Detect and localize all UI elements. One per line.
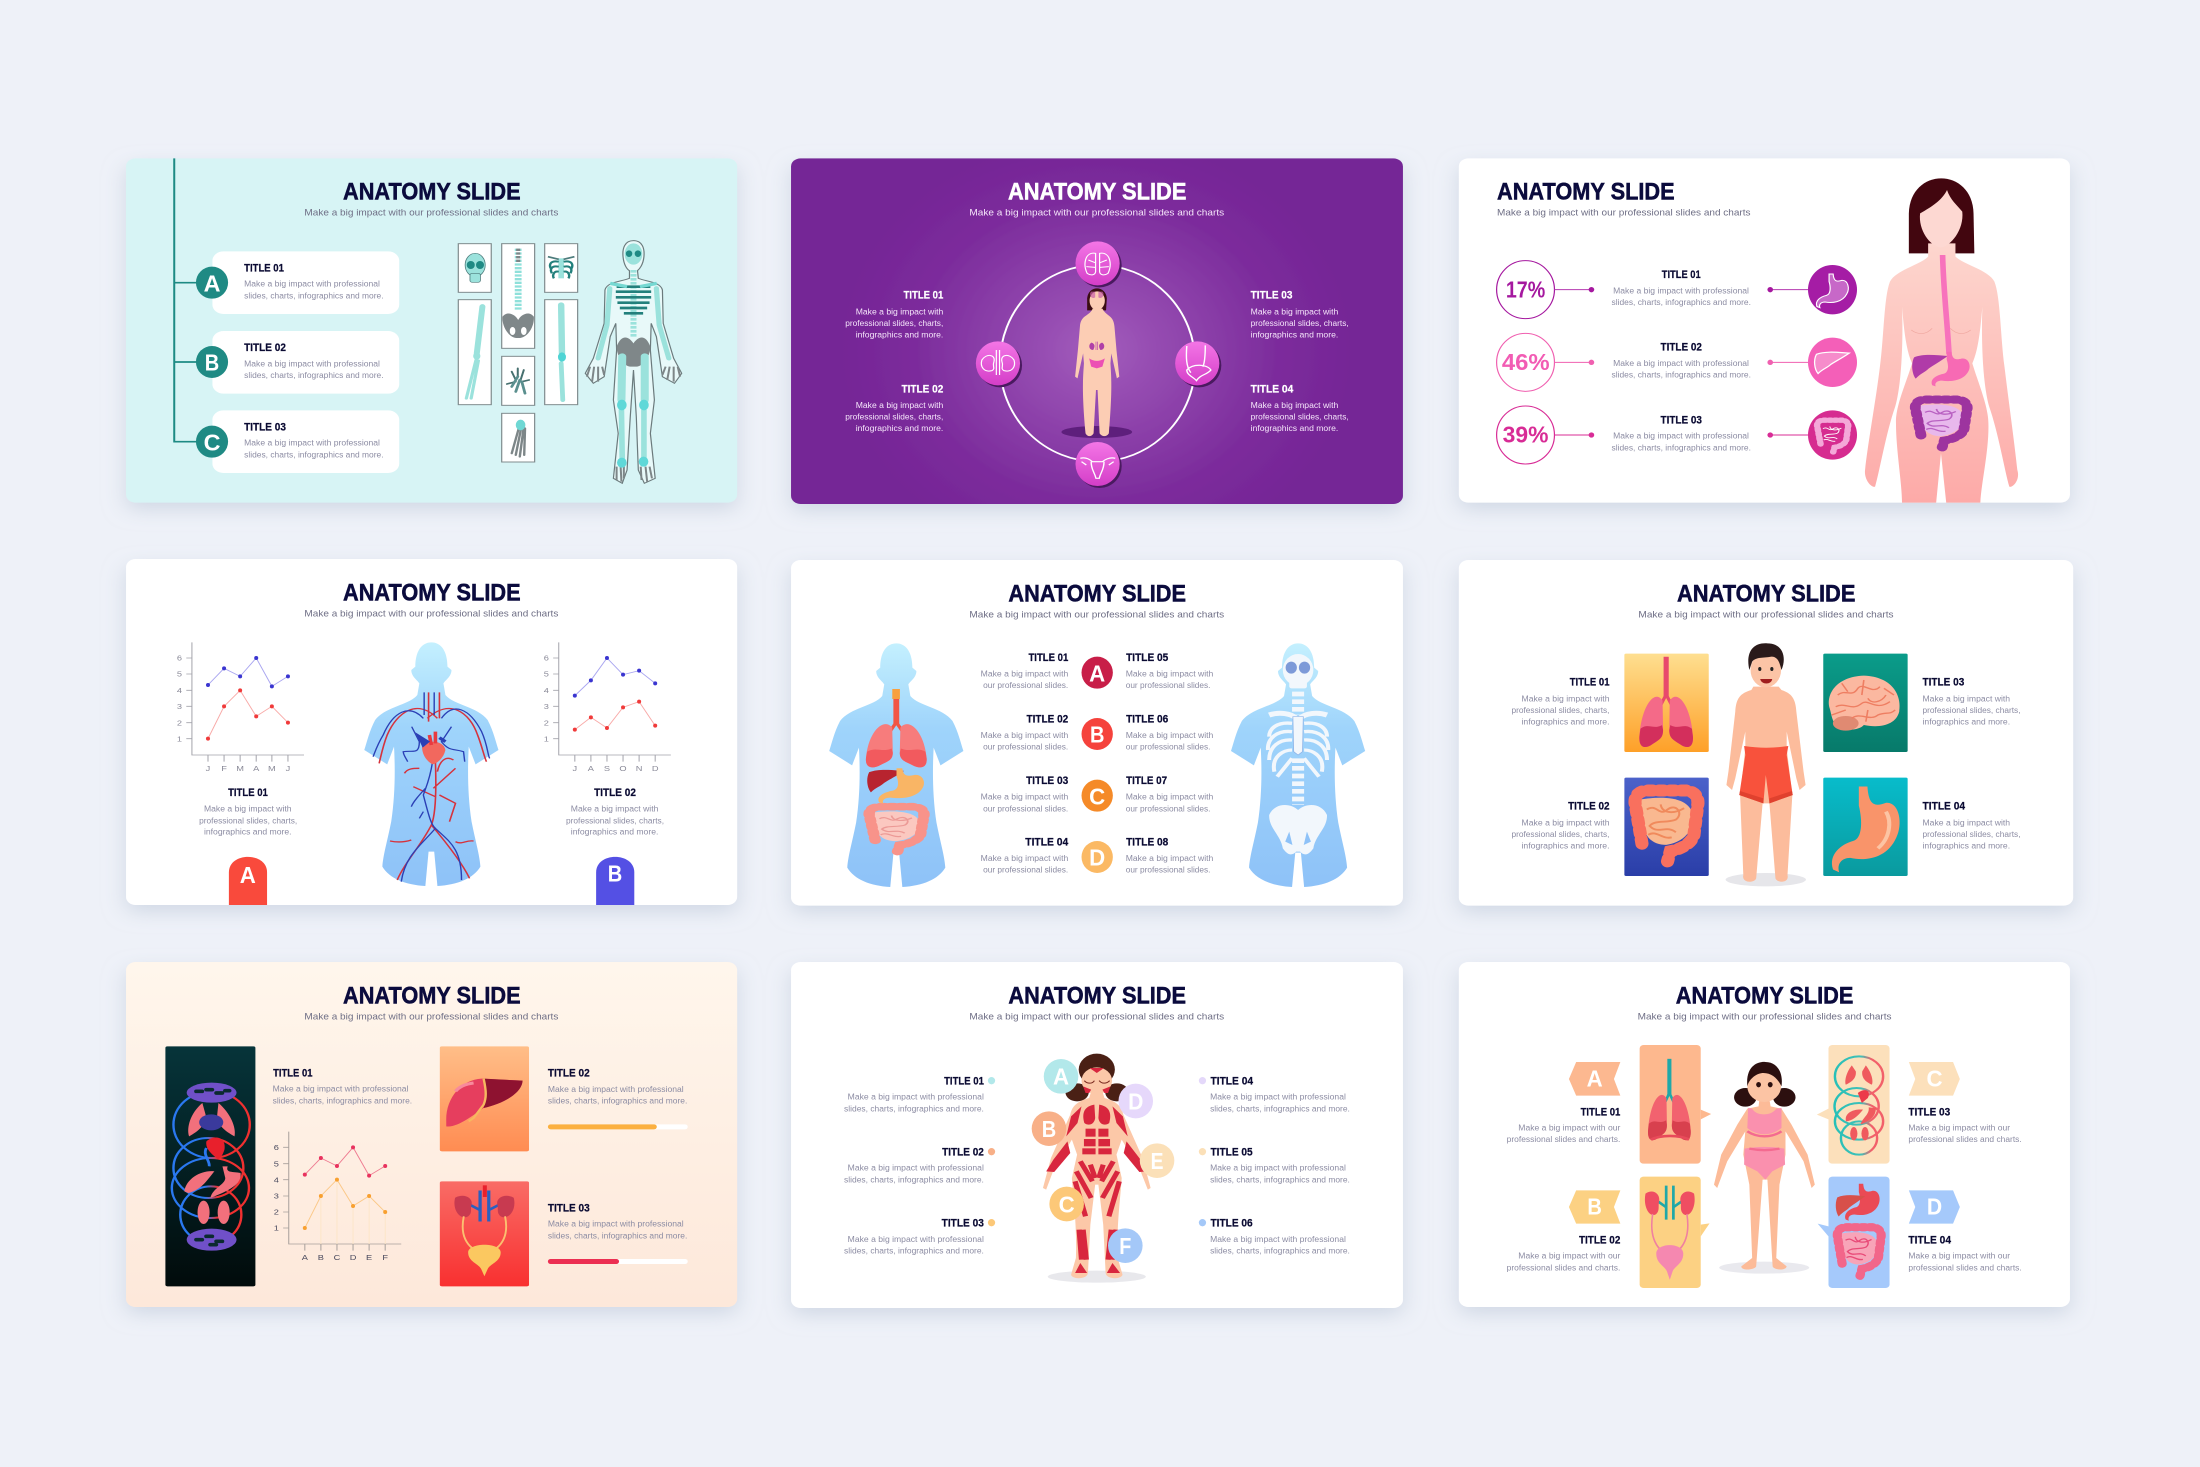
- text: title 03: professional slides, charts,: [1923, 706, 2021, 715]
- text: title 01: Make a big impact with professional: [1613, 286, 1749, 295]
- text: title 03: [1612, 413, 1751, 452]
- item C: TITLE 07: [1126, 774, 1167, 787]
- subtitle: Make a big impact with our professional slides and charts: [1638, 610, 1894, 620]
- line chart B: D: [652, 764, 659, 773]
- bone frames: [458, 244, 578, 462]
- tree connector: [174, 158, 196, 442]
- text: title 03: TITLE 03: [942, 1216, 984, 1229]
- card: intestine: [1624, 778, 1709, 876]
- title: ANATOMY SLIDE: [1008, 178, 1186, 205]
- text: title 03: TITLE 03: [1661, 413, 1702, 426]
- text: title 02: TITLE 02: [548, 1067, 590, 1079]
- item A: [981, 651, 1213, 690]
- line chart A: [177, 642, 304, 773]
- icon: liver: [1767, 338, 1857, 387]
- line chart: D: [350, 1253, 356, 1262]
- text: title 01: professional slides, charts,: [1511, 706, 1610, 715]
- text: title 03: [548, 1201, 687, 1240]
- tag A with text: TITLE 01: [1581, 1105, 1621, 1118]
- card: lungs: [1624, 654, 1709, 752]
- item C: Make a big impact with: [1126, 792, 1213, 801]
- item D: D: [1089, 846, 1105, 871]
- badge E: [1140, 1143, 1174, 1178]
- title: ANATOMY SLIDE: [1677, 580, 1855, 607]
- text: title 01: infographics and more.: [1522, 717, 1610, 726]
- text: title 01: Make a big impact with professional: [848, 1092, 984, 1101]
- item A: Make a big impact with professional: [244, 279, 380, 288]
- item C: slides, charts, infographics and more.: [244, 450, 384, 459]
- tag B with text: professional slides and charts.: [1507, 1263, 1620, 1272]
- tab B: [596, 857, 634, 905]
- line chart: B: [318, 1253, 324, 1262]
- item C: C: [204, 430, 220, 456]
- text: title 01: [1612, 268, 1751, 307]
- line chart: 5: [274, 1159, 279, 1168]
- text: title 01: TITLE 01: [228, 786, 268, 799]
- line chart A: 5: [177, 669, 182, 678]
- subtitle: Make a big impact with our professional slides and charts: [1497, 208, 1751, 218]
- line chart: 2: [274, 1207, 279, 1216]
- torso with skeleton: [1231, 643, 1365, 887]
- item C: Make a big impact with: [981, 792, 1068, 801]
- girl figure: [1714, 1062, 1815, 1274]
- icon: uterus: [1075, 442, 1122, 488]
- badge F: [1108, 1228, 1143, 1263]
- ring: [1000, 265, 1195, 462]
- text: title 02: Make a big impact with: [571, 804, 658, 813]
- tag D with text: Make a big impact with our: [1908, 1251, 2010, 1260]
- item B: B: [205, 351, 219, 376]
- line chart: 6: [274, 1143, 279, 1152]
- text: title 03: slides, charts, infographics and more.: [548, 1231, 687, 1240]
- title: ANATOMY SLIDE: [1497, 178, 1675, 205]
- text: title 03: slides, charts, infographics and more.: [1612, 443, 1751, 452]
- text: title 01: TITLE 01: [904, 289, 943, 301]
- text: title 04: professional slides, charts,: [1251, 412, 1349, 421]
- tag B with text: TITLE 02: [1579, 1233, 1621, 1246]
- line chart A: J: [286, 764, 290, 773]
- line chart A: 1: [177, 734, 182, 743]
- tab A: [229, 857, 267, 905]
- item B: [981, 712, 1213, 751]
- item A: slides, charts, infographics and more.: [244, 291, 384, 300]
- panel: boy and organ cards slide: [1459, 560, 2073, 906]
- panel: line charts and circulatory slide: [126, 559, 737, 905]
- item D: Make a big impact with: [981, 854, 1068, 863]
- stat 39%: 39%: [1503, 423, 1548, 448]
- muscle figure: [1043, 1054, 1151, 1283]
- tag C with text: TITLE 03: [1908, 1105, 1950, 1118]
- subtitle: Make a big impact with our professional slides and charts: [304, 208, 558, 218]
- text: title 02: Make a big impact with professional: [548, 1085, 684, 1094]
- text: title 04: TITLE 04: [1210, 1074, 1253, 1087]
- badge A: A: [1053, 1065, 1069, 1090]
- title: ANATOMY SLIDE: [343, 982, 521, 1009]
- line chart: F: [382, 1253, 388, 1262]
- title: ANATOMY SLIDE: [1676, 982, 1853, 1009]
- item B: our professional slides.: [983, 742, 1068, 751]
- text: title 02: infographics and more.: [856, 424, 943, 433]
- line chart B: 3: [544, 702, 549, 711]
- text: title 02: slides, charts, infographics and more.: [844, 1175, 984, 1184]
- text: title 05: [1199, 1145, 1350, 1184]
- text: title 03: TITLE 03: [1251, 289, 1293, 301]
- line chart: C: [334, 1253, 340, 1262]
- icon: intestine: [1767, 410, 1857, 460]
- text: title 02: TITLE 02: [1661, 341, 1702, 353]
- item D: our professional slides.: [1126, 865, 1210, 874]
- card: liver: [440, 1046, 529, 1151]
- torso with organs: [829, 643, 963, 887]
- item D: TITLE 04: [1025, 836, 1068, 848]
- text: title 02: professional slides, charts,: [845, 412, 943, 421]
- stat 46%: [1497, 333, 1594, 391]
- text: title 04: infographics and more.: [1251, 424, 1338, 433]
- line chart A: A: [253, 764, 260, 773]
- panel: skeleton slide: [126, 158, 737, 503]
- line chart A: 4: [177, 686, 182, 695]
- tag D with text: TITLE 04: [1908, 1233, 1951, 1246]
- subtitle: Make a big impact with our professional slides and charts: [304, 609, 558, 619]
- badge D: [1118, 1084, 1153, 1118]
- subtitle: Make a big impact with our professional slides and charts: [969, 610, 1224, 620]
- item A: TITLE 05: [1126, 651, 1168, 664]
- item B: TITLE 02: [1026, 712, 1068, 725]
- text: title 04: Make a big impact with: [1923, 818, 2010, 827]
- item A: TITLE 01: [1028, 651, 1068, 664]
- icon: hand bones: [507, 368, 529, 393]
- item C: [196, 410, 399, 473]
- tag A with text: A: [1587, 1066, 1603, 1092]
- line chart B: A: [588, 764, 594, 773]
- stat 17%: [1497, 261, 1594, 319]
- badge A: [1044, 1059, 1078, 1094]
- text: title 01: Make a big impact with: [204, 804, 292, 813]
- line chart: E: [366, 1253, 373, 1262]
- text: title 03: infographics and more.: [1923, 717, 2010, 726]
- item D: [981, 836, 1213, 874]
- title: ANATOMY SLIDE: [1008, 982, 1186, 1009]
- tag D with text: professional slides and charts.: [1908, 1263, 2022, 1272]
- tag D with text: D: [1927, 1194, 1942, 1220]
- text: title 06: slides, charts, infographics and more.: [1210, 1246, 1350, 1255]
- text: title 02: slides, charts, infographics and more.: [548, 1096, 687, 1105]
- text: title 01: TITLE 01: [273, 1066, 313, 1079]
- line chart: 4: [274, 1175, 279, 1184]
- item A: our professional slides.: [1126, 681, 1210, 690]
- item B: [196, 331, 399, 394]
- text: title 03: professional slides, charts,: [1251, 319, 1349, 328]
- boy figure: [1726, 643, 1806, 886]
- subtitle: Make a big impact with our professional slides and charts: [304, 1012, 558, 1022]
- card: kidneys: [1640, 1177, 1710, 1288]
- icon: bladder: [1175, 341, 1221, 387]
- icon: spine and pelvis: [502, 249, 534, 338]
- text: title 02: Make a big impact with: [1522, 818, 1610, 827]
- item B: Make a big impact with: [1126, 731, 1213, 740]
- line chart: 3: [274, 1191, 279, 1200]
- text: title 03: Make a big impact with professional: [548, 1219, 684, 1228]
- panel: girl and organ cards slide: [1459, 962, 2070, 1307]
- text: title 02: TITLE 02: [1568, 799, 1610, 812]
- item B: slides, charts, infographics and more.: [244, 371, 384, 380]
- title: ANATOMY SLIDE: [343, 579, 521, 606]
- text: title 04: TITLE 04: [1923, 799, 1965, 812]
- text: title 01: infographics and more.: [856, 330, 943, 339]
- line chart: A: [302, 1253, 308, 1262]
- tab B: B: [608, 862, 622, 887]
- item B: B: [1090, 723, 1104, 748]
- text: title 01: [199, 786, 297, 836]
- item D: TITLE 08: [1126, 836, 1168, 848]
- text: title 02: professional slides, charts,: [1511, 830, 1610, 839]
- title: ANATOMY SLIDE: [1008, 580, 1186, 607]
- item B: Make a big impact with professional: [244, 359, 380, 368]
- text: title 01: Make a big impact with: [856, 307, 943, 316]
- text: title 01: TITLE 01: [1570, 675, 1610, 688]
- item B: Make a big impact with: [981, 731, 1068, 740]
- text: title 02: slides, charts, infographics and more.: [1612, 370, 1751, 379]
- line chart B: 1: [544, 734, 549, 743]
- text: title 01: [273, 1066, 412, 1105]
- panel: percent slide: [1459, 158, 2070, 503]
- text: title 03: Make a big impact with: [1251, 307, 1338, 316]
- text: title 03: TITLE 03: [548, 1201, 590, 1214]
- line chart A: M: [236, 764, 244, 773]
- badge E: E: [1151, 1149, 1163, 1174]
- item C: [981, 774, 1213, 813]
- icon: rib cage: [548, 257, 574, 278]
- text: title 02: [845, 382, 943, 433]
- line chart B: 6: [544, 653, 549, 662]
- text: title 02: professional slides, charts,: [566, 816, 664, 825]
- person figure: [1061, 288, 1132, 438]
- item B: TITLE 06: [1126, 712, 1168, 725]
- line chart A: 3: [177, 702, 182, 711]
- line chart B: S: [604, 764, 610, 773]
- icon: brain: [1075, 241, 1122, 287]
- text: title 03: Make a big impact with professional: [1613, 431, 1749, 440]
- subtitle: Make a big impact with our professional slides and charts: [969, 208, 1224, 218]
- woman figure with digestive organs: [1865, 178, 2018, 503]
- stat 17%: 17%: [1506, 277, 1545, 303]
- badge F: F: [1119, 1234, 1131, 1259]
- text: title 01: Make a big impact with: [1522, 694, 1610, 703]
- item D: our professional slides.: [983, 865, 1068, 874]
- text: title 06: [1199, 1216, 1350, 1255]
- icon: stomach: [1767, 265, 1857, 314]
- panel: muscle figure slide: [791, 962, 1403, 1308]
- text: title 02: infographics and more.: [571, 827, 658, 836]
- tab A: A: [240, 863, 256, 888]
- item B: our professional slides.: [1126, 742, 1210, 751]
- text: title 03: [844, 1216, 995, 1255]
- text: title 06: Make a big impact with professional: [1210, 1235, 1346, 1244]
- icon: leg bones: [558, 305, 566, 400]
- panel: organs and skeleton torso slide: [791, 560, 1403, 906]
- item C: TITLE 03: [244, 420, 286, 433]
- text: title 04: [1251, 382, 1349, 433]
- text: title 05: Make a big impact with professional: [1210, 1163, 1346, 1172]
- tag C with text: [1908, 1062, 2022, 1144]
- tag B with text: [1507, 1190, 1621, 1272]
- text: title 02: infographics and more.: [1522, 841, 1610, 850]
- item C: C: [1089, 784, 1105, 810]
- line chart: [274, 1132, 401, 1262]
- text: title 02: Make a big impact with professional: [848, 1163, 984, 1172]
- item C: TITLE 03: [1026, 774, 1068, 787]
- item A: Make a big impact with: [981, 669, 1068, 678]
- subtitle: Make a big impact with our professional slides and charts: [969, 1012, 1224, 1022]
- panel: cream organ cards slide: [126, 962, 737, 1307]
- text: title 01: slides, charts, infographics and more.: [1612, 298, 1751, 307]
- item D: Make a big impact with: [1126, 854, 1213, 863]
- icon: kidneys: [976, 341, 1022, 387]
- text: title 02: [1612, 341, 1751, 379]
- badge B: B: [1042, 1117, 1056, 1142]
- item A: our professional slides.: [983, 681, 1068, 690]
- text: title 04: [1923, 799, 2021, 850]
- text: title 01: professional slides, charts,: [199, 816, 297, 825]
- text: title 04: slides, charts, infographics and more.: [1210, 1104, 1350, 1113]
- tag A with text: [1507, 1062, 1621, 1144]
- card: kidneys and bladder: [440, 1181, 529, 1286]
- text: title 04: Make a big impact with professional: [1210, 1092, 1346, 1101]
- text: title 03: TITLE 03: [1923, 675, 1964, 688]
- line chart A: M: [268, 764, 276, 773]
- text: title 01: infographics and more.: [204, 827, 292, 836]
- tag C with text: Make a big impact with our: [1908, 1123, 2010, 1132]
- text: title 03: Make a big impact with professional: [848, 1235, 984, 1244]
- text: title 02: [844, 1145, 995, 1184]
- badge C: C: [1059, 1192, 1075, 1218]
- text: title 03: slides, charts, infographics and more.: [844, 1246, 984, 1255]
- card: digestive organs: [1818, 1177, 1890, 1288]
- text: title 04: TITLE 04: [1251, 382, 1293, 395]
- circulatory body figure: [364, 642, 498, 886]
- text: title 02: TITLE 02: [942, 1145, 984, 1158]
- line chart A: 6: [177, 653, 182, 662]
- progress bar: title 03: [548, 1259, 688, 1264]
- progress bar: title 02: [548, 1124, 688, 1129]
- text: title 01: TITLE 01: [1662, 268, 1701, 281]
- text: title 02: TITLE 02: [902, 382, 943, 395]
- skeleton figure: [585, 241, 682, 483]
- line chart: 1: [274, 1223, 279, 1232]
- tag C with text: C: [1927, 1066, 1943, 1092]
- line chart B: N: [636, 764, 642, 773]
- text: title 04: infographics and more.: [1923, 841, 2010, 850]
- text: title 01: [1511, 675, 1610, 726]
- tag C with text: professional slides and charts.: [1908, 1135, 2022, 1144]
- text: title 02: [566, 786, 664, 836]
- line chart B: J: [573, 764, 577, 773]
- card: stomach: [1823, 778, 1908, 876]
- text: title 06: TITLE 06: [1210, 1216, 1253, 1229]
- tag D with text: [1908, 1190, 2022, 1272]
- text: title 02: [1511, 799, 1610, 850]
- item A: TITLE 01: [244, 261, 284, 274]
- stat 46%: 46%: [1502, 350, 1550, 375]
- text: title 02: [548, 1067, 687, 1105]
- text: title 01: TITLE 01: [944, 1074, 984, 1087]
- text: title 01: slides, charts, infographics and more.: [844, 1104, 984, 1113]
- text: title 04: [1199, 1074, 1350, 1113]
- subtitle: Make a big impact with our professional slides and charts: [1638, 1012, 1892, 1022]
- text: title 04: Make a big impact with: [1251, 401, 1338, 410]
- stat 39%: [1497, 406, 1594, 464]
- item A: A: [204, 271, 220, 297]
- text: title 01: Make a big impact with professional: [273, 1084, 408, 1093]
- line chart B: 5: [544, 669, 549, 678]
- text: title 05: TITLE 05: [1210, 1145, 1253, 1158]
- card: circulatory system: [1817, 1045, 1890, 1164]
- item C: our professional slides.: [1126, 804, 1210, 813]
- icon: foot bones: [512, 420, 525, 457]
- icon: arm bones: [466, 307, 482, 398]
- tag A with text: professional slides and charts.: [1507, 1135, 1620, 1144]
- item B: TITLE 02: [244, 341, 286, 354]
- line chart B: 2: [544, 718, 549, 727]
- line chart B: 4: [544, 686, 549, 695]
- text: title 03: Make a big impact with: [1923, 694, 2010, 703]
- item A: Make a big impact with: [1126, 669, 1213, 678]
- tag B with text: B: [1587, 1194, 1602, 1220]
- card: circulatory system: [165, 1046, 255, 1286]
- text: title 03: [1923, 675, 2021, 726]
- badge B: [1032, 1111, 1066, 1146]
- line chart B: [544, 642, 671, 773]
- card: lungs: [1640, 1045, 1711, 1164]
- tag A with text: Make a big impact with our: [1518, 1123, 1620, 1132]
- text: title 03: [1251, 289, 1349, 339]
- text: title 01: slides, charts, infographics and more.: [273, 1096, 412, 1105]
- text: title 02: TITLE 02: [594, 786, 636, 799]
- text: title 01: [844, 1074, 995, 1113]
- badge C: [1049, 1187, 1084, 1221]
- panel: purple circle slide: [791, 158, 1403, 504]
- item A: [196, 251, 399, 314]
- line chart B: O: [619, 764, 627, 773]
- text: title 01: [845, 289, 943, 339]
- text: title 05: slides, charts, infographics and more.: [1210, 1175, 1350, 1184]
- item C: Make a big impact with professional: [244, 438, 380, 447]
- text: title 02: Make a big impact with: [856, 401, 943, 410]
- text: title 02: Make a big impact with professional: [1613, 359, 1749, 368]
- icon: skull: [465, 253, 485, 282]
- item C: our professional slides.: [983, 804, 1068, 813]
- title: ANATOMY SLIDE: [343, 178, 521, 205]
- line chart A: 2: [177, 718, 182, 727]
- line chart A: F: [221, 764, 227, 773]
- card: brain: [1823, 654, 1908, 752]
- item A: A: [1089, 661, 1105, 687]
- badge D: D: [1128, 1089, 1143, 1115]
- line chart A: J: [206, 764, 210, 773]
- tag B with text: Make a big impact with our: [1518, 1251, 1620, 1260]
- text: title 03: infographics and more.: [1251, 330, 1338, 339]
- text: title 01: professional slides, charts,: [845, 319, 943, 328]
- text: title 04: professional slides, charts,: [1923, 830, 2021, 839]
